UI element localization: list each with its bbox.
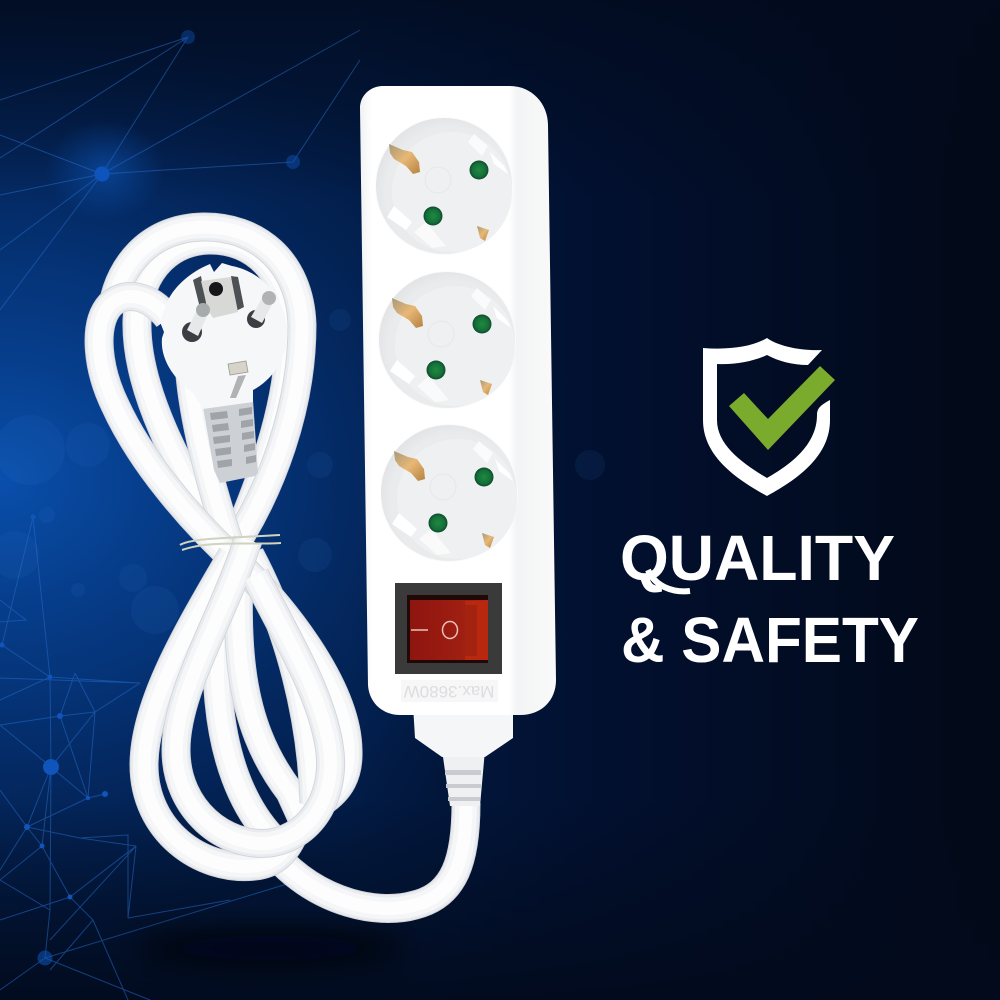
cord: outer lobe (144, 555, 292, 867)
power cord (99, 227, 466, 908)
socket 2 (378, 271, 516, 409)
plug pin right (247, 291, 276, 328)
strip body (360, 86, 556, 715)
cord: inner top loop (137, 240, 290, 540)
heading (620, 522, 919, 676)
strip neck (413, 705, 513, 757)
strain relief (442, 750, 485, 806)
cord: back strand middle (238, 545, 305, 825)
cord: hook and right lobe (99, 296, 348, 802)
plug earth clip (193, 276, 244, 318)
network pattern (0, 30, 605, 1000)
green check (729, 366, 835, 450)
cord: lead to strip (275, 803, 466, 908)
cord: front lobe (176, 540, 331, 843)
shield outline (703, 338, 830, 496)
plug pin left (182, 303, 210, 342)
cord: outer top loop (113, 227, 302, 545)
heading line 2: & SAFETY (621, 604, 919, 676)
heading line 1: QUALITY (620, 522, 895, 594)
cord: back strand left (217, 545, 272, 838)
socket 3 (380, 424, 518, 562)
socket 1 (375, 117, 513, 255)
plug face (160, 263, 287, 409)
cord: back strand right (250, 555, 314, 803)
plug (160, 263, 287, 483)
power strip (360, 86, 556, 806)
cord: plug stem strand (190, 375, 230, 545)
Q tail (648, 570, 690, 591)
rating plate: Max.3680W (404, 682, 494, 701)
plug lower clip (228, 361, 248, 398)
rocker switch (395, 583, 502, 674)
floor shadow (135, 934, 405, 962)
tie wire (180, 535, 281, 550)
icon: shield with check (703, 338, 835, 496)
plug stem and grip (203, 400, 258, 483)
